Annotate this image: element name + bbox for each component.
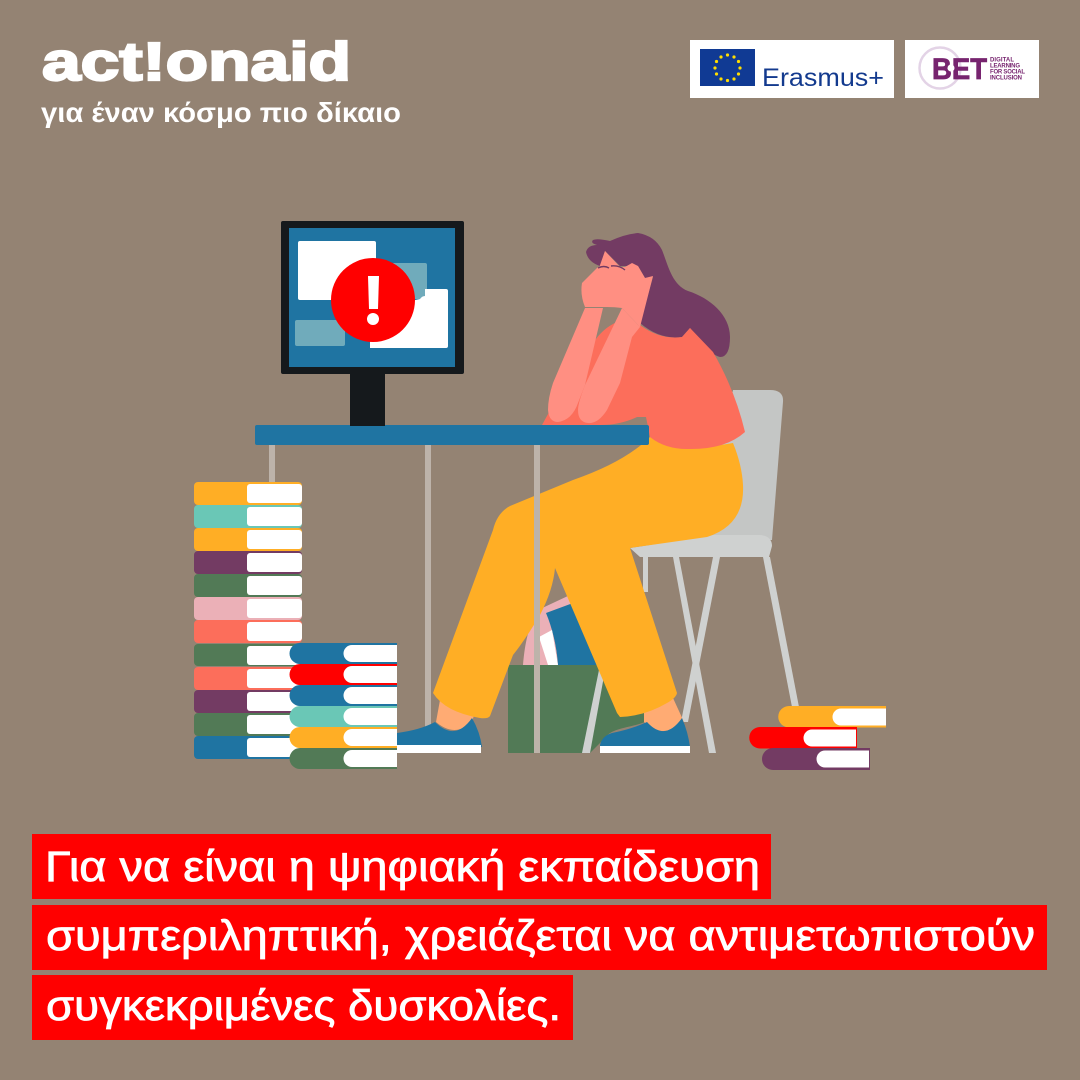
desk top <box>255 425 649 445</box>
tagline: για έναν κόσμο πιο δίκαιο <box>41 97 401 128</box>
logo: actionaid <box>41 32 401 128</box>
line 2: συμπεριληπτική, χρειάζεται να αντιμετωπιστούν <box>46 912 1035 960</box>
logo: BET digital learning: FOR SOCIAL <box>990 70 1025 76</box>
left ankle and shoe <box>397 700 482 753</box>
logo: Erasmus+ <box>690 40 894 98</box>
logo: BET digital learning: DIGITAL <box>990 58 1014 64</box>
logo: BET digital learning: INCLUSION <box>990 76 1022 82</box>
headline: red text bars <box>32 834 1047 1040</box>
logo: actionaid: act!onaid <box>42 32 351 92</box>
desk leg front <box>534 445 540 753</box>
chair <box>582 390 799 753</box>
logo: BET digital learning: BET <box>932 53 987 86</box>
right ankle and shoe <box>600 698 690 753</box>
book stack: right floor <box>749 706 886 770</box>
book stack: short middle <box>290 643 397 769</box>
hair <box>586 233 730 357</box>
logo: Erasmus+: Erasmus+ <box>762 64 884 92</box>
line 2 <box>32 905 1047 970</box>
logo: BET digital learning <box>905 40 1039 98</box>
line 1: Για να είναι η ψηφιακή εκπαίδευση <box>45 843 760 891</box>
bag with folders <box>508 595 645 753</box>
desk leg rear <box>269 445 275 485</box>
line 3: συγκεκριμένες δυσκολίες. <box>46 982 561 1030</box>
logo: BET digital learning: LEARNING <box>990 64 1020 70</box>
shirt <box>542 322 745 449</box>
line 3 <box>32 975 573 1040</box>
yellow trousers <box>433 437 743 718</box>
illustration: woman at desk with computer and books <box>194 221 886 770</box>
face and forearms <box>548 251 653 423</box>
line 1 <box>32 834 771 899</box>
book stack: tall left <box>194 482 302 759</box>
eyes <box>598 266 625 270</box>
computer monitor with alert <box>281 221 464 426</box>
